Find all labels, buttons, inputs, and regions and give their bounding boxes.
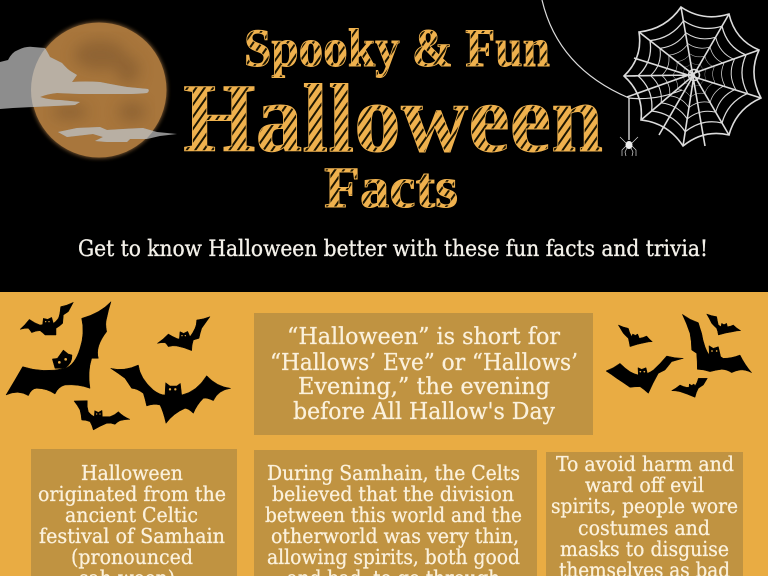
title	[183, 18, 603, 220]
header background	[0, 0, 768, 292]
title line: Facts: Facts	[324, 155, 458, 220]
Samhain fact text	[265, 461, 522, 576]
icon: full moon with clouds	[0, 22, 177, 158]
panel: intro fact	[254, 313, 593, 435]
icon: left bat group	[6, 302, 231, 430]
costumes fact text: costumes and	[578, 516, 710, 540]
intro fact text: Evening,” the evening	[298, 372, 550, 400]
origins fact text: (pronounced	[71, 545, 193, 569]
origins fact text: ancient Celtic	[65, 503, 198, 527]
costumes fact text: spirits, people wore	[551, 494, 738, 518]
icon: hanging spider	[620, 98, 638, 156]
Samhain fact text: During Samhain, the Celts	[267, 461, 520, 485]
intro fact text	[270, 322, 578, 425]
panel: Samhain fact	[254, 450, 537, 576]
costumes fact text: To avoid harm and	[556, 452, 734, 476]
costumes fact text	[551, 452, 738, 576]
icon: right bat group	[606, 314, 752, 397]
costumes fact text: masks to disguise	[560, 537, 729, 561]
spider thread	[542, 0, 682, 99]
title line: Spooky & Fun: Spooky & Fun	[244, 18, 550, 78]
intro fact text: before All Hallow's Day	[293, 397, 555, 425]
origins fact text: Halloween	[81, 461, 183, 485]
Samhain fact text: between this world and the	[265, 503, 522, 527]
Samhain fact text: allowing spirits, both good	[267, 545, 520, 569]
Samhain fact text: otherworld was very thin,	[271, 524, 519, 548]
panel: origins fact	[31, 449, 237, 576]
icon: spider web	[624, 7, 761, 146]
Samhain fact text: believed that the division	[272, 482, 514, 506]
subtitle: Get to know Halloween better with these fun facts and trivia!	[78, 237, 708, 262]
costumes fact text: ward off evil	[585, 473, 704, 497]
title line: Halloween: Halloween	[183, 65, 603, 173]
origins fact text: originated from the	[38, 482, 226, 506]
origins fact text	[38, 461, 226, 576]
intro fact text: “Hallows’ Eve” or “Hallows’	[270, 348, 578, 376]
intro fact text: “Halloween” is short for	[287, 322, 561, 350]
orange background	[0, 292, 768, 576]
panel: costumes fact	[546, 452, 743, 576]
origins fact text: festival of Samhain	[39, 524, 225, 548]
